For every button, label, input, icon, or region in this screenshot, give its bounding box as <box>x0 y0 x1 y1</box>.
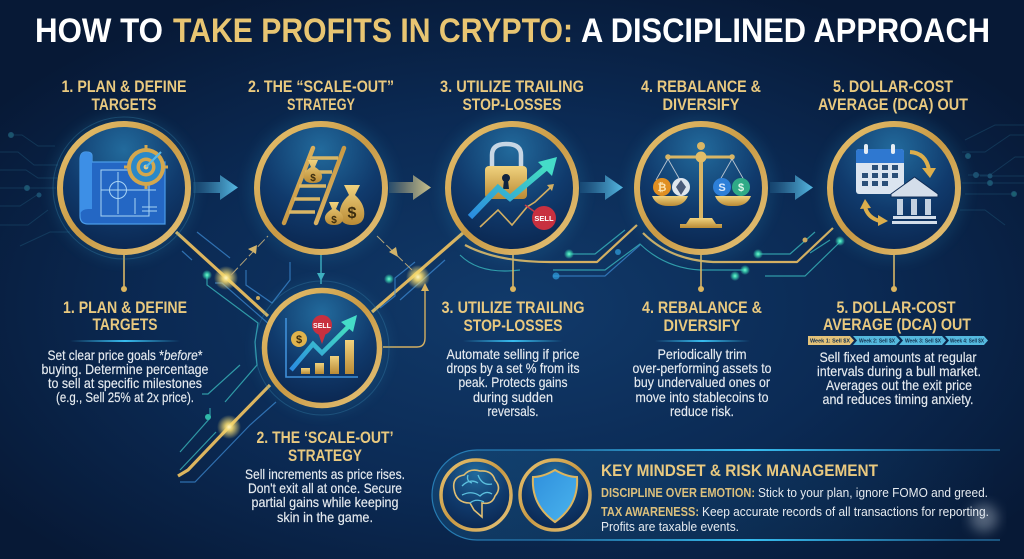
step 3 heading <box>440 78 584 114</box>
connector: scale-out circle back up to trace <box>383 283 429 347</box>
step 4 details: buy undervalued ones or <box>634 375 770 390</box>
step 3 details: peak. Protects gains <box>458 375 568 390</box>
step 4 details: reduce risk. <box>670 404 734 419</box>
step 2 heading: 2. THE “SCALE-OUT” <box>248 78 394 96</box>
step 4 heading: 4. REBALANCE & <box>641 78 761 96</box>
step 1 details: buying. Determine percentage <box>42 362 208 377</box>
step 2 heading <box>248 78 394 114</box>
arrow: step 3 to step 4 <box>580 175 623 200</box>
circuit traces connecting the steps <box>176 225 845 482</box>
step 3 circle: padlock and trailing stop chart: SELL <box>534 214 554 223</box>
step 4 details: DIVERSIFY <box>664 317 740 335</box>
step 3 heading: 3. UTILIZE TRAILING <box>440 78 584 96</box>
step 2 details: STRATEGY <box>288 447 362 465</box>
title: HOW TO <box>35 12 163 50</box>
step 2 details: skin in the game. <box>277 510 373 525</box>
DCA week chips: Week 3: Sell $X <box>905 338 941 344</box>
step 4 details: 4. REBALANCE & <box>642 299 762 317</box>
step 1 details: 1. PLAN & DEFINE <box>63 299 187 317</box>
DCA week chips: Week 2: Sell $X <box>859 338 895 344</box>
tax awareness: Profits are taxable events. <box>601 519 739 534</box>
step 3 details: during sudden <box>473 390 553 405</box>
step 5 heading: 5. DOLLAR-COST <box>833 78 953 96</box>
arrow: step 4 to step 5 <box>770 175 813 200</box>
DCA week chips: Week 1: Sell $X <box>810 338 850 344</box>
dashed link: circle 1 to circle 2 <box>231 236 268 275</box>
step 2 heading: STRATEGY <box>287 96 355 114</box>
title <box>35 12 990 50</box>
step 4 details: over-performing assets to <box>632 361 772 376</box>
step 2 details: Don't exit all at once. Secure <box>248 481 402 496</box>
step 3 circle: padlock and trailing stop chart <box>438 114 586 262</box>
icon: brain <box>441 460 511 530</box>
scale-out circle: chart with sell pin <box>254 280 390 416</box>
step 5 details: and reduces timing anxiety. <box>822 392 974 407</box>
discipline over emotion: DISCIPLINE OVER EMOTION: <box>601 485 755 500</box>
discipline over emotion <box>601 485 988 500</box>
panel: key mindset and risk management <box>432 449 1000 541</box>
step 5 details: intervals during a bull market. <box>817 364 981 379</box>
step 2 circle: ladder and money bags: $ <box>310 173 316 184</box>
step 1 heading: 1. PLAN & DEFINE <box>62 78 186 96</box>
step 4 circle: balance scale and coins <box>627 114 775 262</box>
DCA week chips: Week 4: Sell $X <box>950 338 984 344</box>
step 3 details: STOP-LOSSES <box>464 317 562 335</box>
step 5 details: Averages out the exit price <box>826 378 972 393</box>
step 2 details: partial gains while keeping <box>252 495 398 510</box>
step 1 details <box>42 299 208 405</box>
step 2 circle: ladder and money bags: $ <box>331 215 337 226</box>
title: A DISCIPLINED APPROACH <box>581 12 990 50</box>
step 3 details: drops by a set % from its <box>446 361 580 376</box>
step 4 details <box>632 299 772 419</box>
step 4 circle: balance scale and coins: $ <box>738 182 744 194</box>
step 1 details: Set clear price goals *before* <box>48 348 203 363</box>
step 2 circle: ladder and money bags <box>247 114 395 262</box>
step 3 heading: STOP-LOSSES <box>462 96 562 114</box>
step 5 circle: calendar and bank <box>820 114 968 262</box>
tax awareness: Keep accurate records of all transactions for reporting. <box>702 504 989 519</box>
step 1 heading: TARGETS <box>92 96 156 114</box>
step 1 details: (e.g., Sell 25% at 2x price). <box>56 390 194 405</box>
step 3 details: Automate selling if price <box>446 347 580 362</box>
connector: step 3 to text <box>510 254 516 292</box>
step 4 details: move into stablecoins to <box>636 390 768 405</box>
connector: step 1 to text <box>121 254 127 292</box>
DCA week chips <box>808 336 988 345</box>
step 4 heading <box>641 78 761 114</box>
tax awareness <box>601 504 989 534</box>
step 4 details: Periodically trim <box>658 347 746 362</box>
step 2 circle: ladder and money bags: $ <box>348 205 357 222</box>
sparkle <box>970 504 998 532</box>
step 1 heading <box>62 78 186 114</box>
step 3 details: reversals. <box>488 404 538 419</box>
step 5 details: Sell fixed amounts at regular <box>820 350 977 365</box>
step 1 circle: blueprint and target <box>50 114 198 262</box>
tax awareness: TAX AWARENESS: <box>601 504 699 519</box>
connector: step 2 to scale-out circle <box>317 254 325 284</box>
step 5 details: AVERAGE (DCA) OUT <box>823 316 971 334</box>
key mindset heading: KEY MINDSET & RISK MANAGEMENT <box>601 461 879 480</box>
step 5 details: 5. DOLLAR-COST <box>836 299 956 317</box>
dashed link: circle 2 to node <box>377 236 412 270</box>
discipline over emotion: Stick to your plan, ignore FOMO and greed. <box>758 485 988 500</box>
step 2 details: Sell increments as price rises. <box>245 467 405 482</box>
arrow: step 2 to step 3 <box>389 175 431 200</box>
scale-out circle: chart with sell pin: $ <box>296 334 302 346</box>
icon: shield <box>520 460 590 530</box>
step 5 heading <box>818 78 968 114</box>
step 3 details <box>442 299 584 419</box>
connector: step 5 to text <box>891 254 897 292</box>
step 1 details: TARGETS <box>92 316 158 334</box>
step 5 heading: AVERAGE (DCA) OUT <box>818 96 968 114</box>
arrow: step 1 to step 2 <box>193 175 238 200</box>
circuit pattern: left <box>0 132 70 246</box>
step 3 details: 3. UTILIZE TRAILING <box>442 299 584 317</box>
step 5 details <box>817 299 981 407</box>
scale-out circle: chart with sell pin: SELL <box>313 323 332 330</box>
connector: step 4 to text <box>698 254 704 292</box>
step 1 details: to sell at specific milestones <box>48 376 202 391</box>
circuit pattern: right <box>960 125 1024 225</box>
step 4 heading: DIVERSIFY <box>662 96 740 114</box>
step 2 details: 2. THE ‘SCALE-OUT’ <box>256 429 394 447</box>
step 2 details <box>245 429 405 525</box>
step 4 circle: balance scale and coins: S <box>718 182 726 194</box>
title: TAKE PROFITS IN CRYPTO: <box>173 12 573 50</box>
step 4 circle: balance scale and coins: ₿ <box>658 182 667 194</box>
